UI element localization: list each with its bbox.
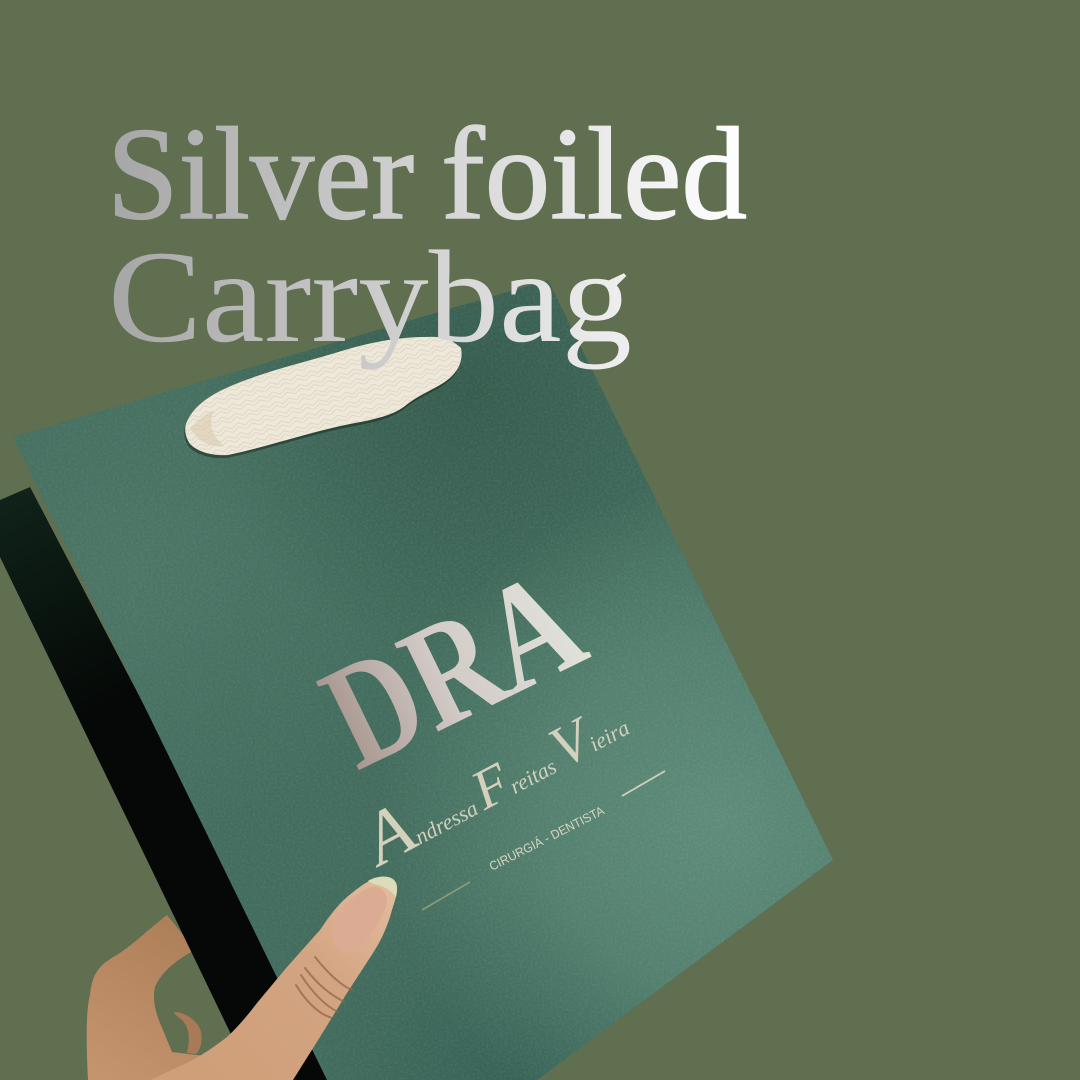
thumb nail	[332, 887, 387, 953]
logo: signature name: Andressa Freitas Vieira	[345, 675, 639, 883]
title line 2: Carrybag	[108, 223, 632, 370]
logo: profession line: CIRURGIÁ - DENTISTA	[487, 802, 607, 874]
bag side shadow	[0, 487, 340, 1080]
title line 1: foiled: foiled	[441, 100, 747, 247]
nail tip	[368, 877, 397, 897]
logo: right rule	[622, 771, 665, 796]
title	[107, 100, 747, 370]
logo: DRA: DRA	[299, 537, 607, 801]
knuckle creases	[296, 957, 352, 1018]
hand: thumb	[150, 877, 397, 1080]
carry bag	[0, 270, 840, 1080]
infographic canvas	[0, 124, 833, 1080]
title line 1: Silver: Silver	[107, 100, 414, 247]
logo: left rule	[422, 882, 470, 910]
hand: back fingers	[87, 915, 205, 1080]
bag front panel	[13, 280, 833, 1080]
ribbon handle	[184, 337, 462, 458]
